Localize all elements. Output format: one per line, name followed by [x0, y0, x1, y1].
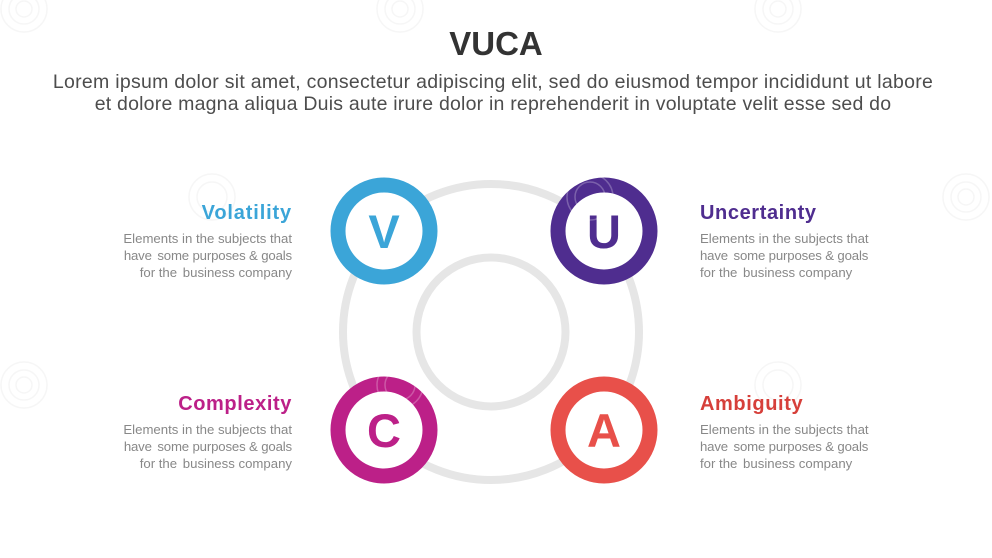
- text: Ambiguity description: Elements in the subjects that: [700, 422, 869, 437]
- icon: C circle: [338, 384, 430, 476]
- subtitle text: [53, 71, 933, 115]
- subtitle text: et dolore magna aliqua Duis aute irure dolor in reprehenderit in voluptate velit esse sed do: [95, 93, 891, 115]
- text: Volatility description: have some purposes & goals: [124, 248, 292, 263]
- outer ring: [343, 184, 639, 480]
- text: Complexity description: for the business company: [140, 456, 292, 471]
- panel: Complexity: [123, 393, 292, 471]
- heading: Ambiguity: Ambiguity: [700, 393, 803, 415]
- text: Complexity description: Elements in the subjects that: [123, 422, 292, 437]
- text: Complexity description: have some purposes & goals: [124, 439, 292, 454]
- icon: V circle: V: [368, 205, 400, 258]
- inner ring: [416, 258, 566, 406]
- heading: Complexity: Complexity: [178, 393, 292, 415]
- icon: A circle: A: [587, 404, 621, 457]
- text: Uncertainty description: [700, 231, 869, 280]
- text: Volatility description: Elements in the subjects that: [123, 231, 292, 246]
- panel: Uncertainty: [700, 202, 869, 280]
- text: Complexity description: [123, 422, 292, 471]
- text: Volatility description: for the business company: [140, 265, 292, 280]
- text: Uncertainty description: have some purposes & goals: [700, 248, 868, 263]
- subtitle text: Lorem ipsum dolor sit amet, consectetur adipiscing elit, sed do eiusmod tempor incididunt ut labore: [53, 71, 933, 93]
- icon: C circle: C: [367, 404, 401, 457]
- text: Volatility description: [123, 231, 292, 280]
- heading: Volatility: Volatility: [202, 202, 292, 224]
- text: Ambiguity description: [700, 422, 869, 471]
- panel: Volatility: [123, 202, 292, 280]
- text: Ambiguity description: have some purposes & goals: [700, 439, 868, 454]
- text: Ambiguity description: for the business company: [700, 456, 852, 471]
- icon: U circle: [558, 185, 650, 277]
- watermark spirals over coloured circles: [377, 174, 613, 408]
- icon: A circle: [558, 384, 650, 476]
- panel: Ambiguity: [700, 393, 869, 471]
- heading: Uncertainty: Uncertainty: [700, 202, 817, 224]
- title: VUCA: [449, 25, 543, 62]
- text: Uncertainty description: for the business company: [700, 265, 852, 280]
- icon: V circle: [338, 185, 430, 277]
- icon: U circle: U: [587, 205, 621, 258]
- text: Uncertainty description: Elements in the subjects that: [700, 231, 869, 246]
- watermark spirals: [1, 0, 989, 408]
